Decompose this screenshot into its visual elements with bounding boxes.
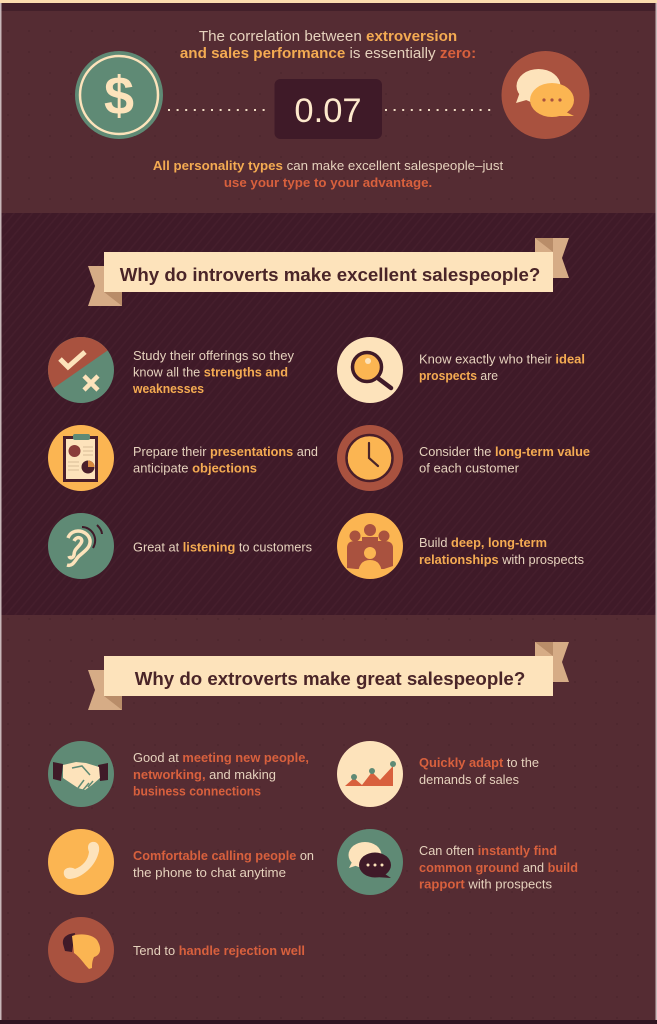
heading: correlation statement xyxy=(180,28,476,62)
icon: phone xyxy=(48,829,114,895)
item: presentations: anticipate objections xyxy=(133,460,257,476)
panel: introverts xyxy=(2,213,656,615)
banner: introverts heading xyxy=(88,238,569,306)
heading: correlation statement: and sales performance is essentially zero: xyxy=(180,45,476,62)
banner: extroverts heading xyxy=(88,642,569,710)
dotted connector right xyxy=(385,109,495,111)
item: listening: Great at listening to customers xyxy=(133,540,312,554)
text: conclusion xyxy=(153,158,503,190)
text: conclusion: use your type to your advantage. xyxy=(224,175,432,190)
item: long-term value: Consider the long-term value xyxy=(419,444,590,459)
heading: correlation statement: The correlation between extroversion xyxy=(199,28,457,45)
panel: extroverts xyxy=(2,615,656,1020)
item: strengths and weaknesses: Study their offerings so they xyxy=(133,348,294,363)
banner: introverts heading: Why do introverts make excellent salespeople? xyxy=(120,264,540,285)
item: common ground: rapport with prospects xyxy=(419,876,553,892)
icon: thumbs down xyxy=(48,917,114,983)
value box: 0.07 xyxy=(274,79,382,139)
item: calling: the phone to chat anytime xyxy=(133,865,286,880)
item: strengths and weaknesses xyxy=(48,337,294,403)
item: long-term value: of each customer xyxy=(419,460,520,476)
item: networking xyxy=(48,741,309,807)
item: rejection xyxy=(48,917,305,983)
top strip xyxy=(0,0,657,11)
icon: handshake xyxy=(48,741,114,807)
dotted connector left xyxy=(168,109,268,111)
item: listening xyxy=(48,513,312,579)
text: conclusion: All personality types can make excellent salespeople–just xyxy=(153,158,503,173)
item: adapt: Quickly adapt to the xyxy=(419,755,539,770)
item: long-term value xyxy=(337,425,590,491)
item: calling xyxy=(48,829,314,895)
item: adapt xyxy=(337,741,539,807)
item: presentations xyxy=(48,425,318,491)
icon: clock xyxy=(337,425,403,491)
bottom strip xyxy=(0,1020,657,1024)
item: adapt: demands of sales xyxy=(419,772,519,787)
item: calling: Comfortable calling people on xyxy=(133,848,314,863)
item: presentations: Prepare their presentations and xyxy=(133,444,318,459)
banner: extroverts heading: Why do extroverts make great salespeople? xyxy=(135,668,525,689)
item: common ground: Can often instantly find xyxy=(419,843,557,858)
icon: dollar coin: $ xyxy=(104,66,134,126)
item: ideal prospects: prospects are xyxy=(419,368,498,383)
item: deep relationships xyxy=(337,513,584,579)
item: ideal prospects: Know exactly who their ideal xyxy=(419,352,585,366)
panel: correlation xyxy=(2,11,656,213)
item: networking: business connections xyxy=(133,784,261,798)
item: common ground: common ground and build xyxy=(419,860,578,875)
icon: check and cross xyxy=(48,337,114,403)
item: deep relationships: relationships with prospects xyxy=(419,552,584,567)
item: rejection: Tend to handle rejection well xyxy=(133,943,305,958)
item: deep relationships: Build deep, long-term xyxy=(419,535,547,550)
icon: ear xyxy=(48,513,114,579)
item: strengths and weaknesses: know all the strengths and xyxy=(133,364,288,380)
icon: dollar coin xyxy=(75,51,163,139)
icon: clipboard xyxy=(48,425,114,491)
item: networking: networking, and making xyxy=(133,767,276,782)
icon: magnifier xyxy=(337,337,403,403)
item: common ground xyxy=(337,829,578,895)
value box: 0.07: 0.07 xyxy=(294,92,362,130)
icon: chat bubbles xyxy=(502,51,590,139)
item: strengths and weaknesses: weaknesses xyxy=(132,381,204,396)
item: networking: Good at meeting new people, xyxy=(133,750,309,765)
item: ideal prospects xyxy=(337,337,585,403)
icon: rising chart xyxy=(337,741,403,807)
icon: dark chat bubbles xyxy=(337,829,403,895)
icon: people xyxy=(337,513,403,579)
